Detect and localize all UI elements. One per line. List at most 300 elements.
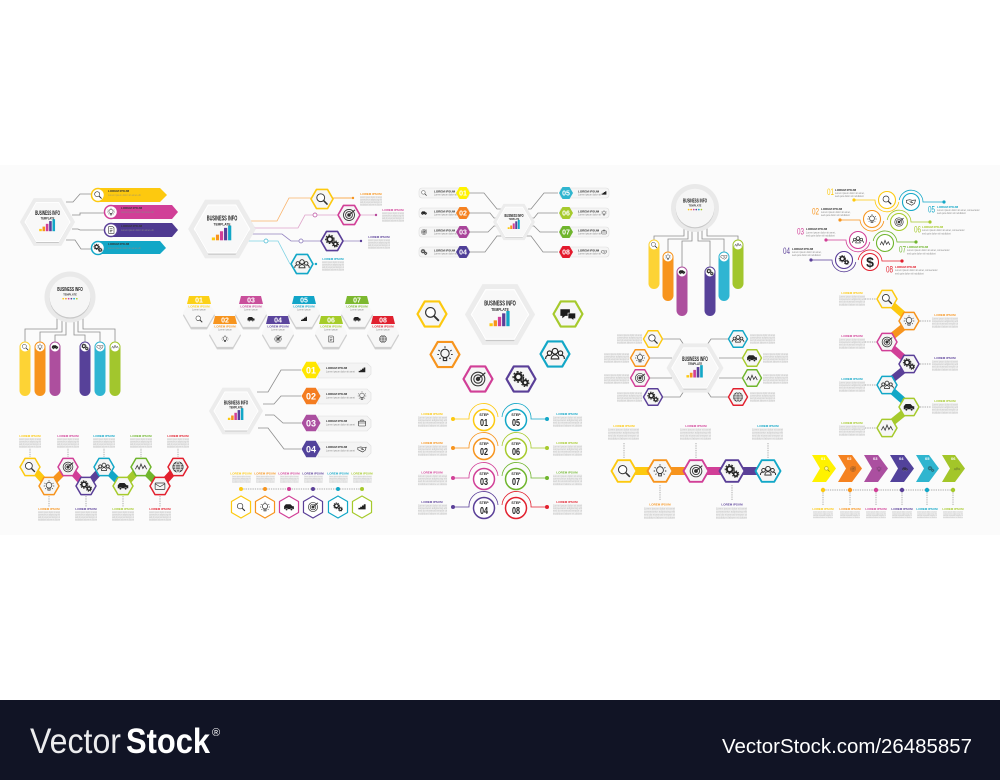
timeline labels: LOREM IPSUM [891,507,913,511]
step 04 [451,491,498,518]
step 01 [451,403,498,430]
label 4: LOREM IPSUM [322,257,344,261]
icon hex: target [464,366,492,392]
pill magenta [676,267,688,316]
label 2 [382,208,404,222]
row 02: 02 [306,392,316,402]
ribbon teal: LOREM IPSUM [108,242,130,246]
step 04: STEP [479,501,489,505]
text 05 [928,204,980,215]
tab 07 [559,226,609,238]
hub circle [44,272,96,322]
hex gears [328,496,348,518]
card 05: Lorem ipsum [297,308,311,312]
connector lines [469,193,558,252]
card 04: LOREM IPSUM [267,324,289,328]
step 08: 08 [512,506,520,517]
step 08: STEP [511,501,521,505]
text 02: sed quis dolor sit incididunt [821,214,850,217]
chevron 01 [812,455,836,482]
text 03: 03 [797,226,804,236]
text 07: Lorem ipsum dolor sit amet, consectetur [907,249,950,252]
ribbon teal [92,241,166,254]
card 04: Lorem ipsum [271,328,285,332]
text 04: sed quis dolor sit incididunt [792,254,821,257]
hex search [231,496,251,518]
tab 08: Lorem ipsum dolor sit [578,252,601,256]
tab 08 [559,246,609,258]
tab 01: 01 [459,190,467,198]
step 05: 05 [512,418,520,429]
hub hexagon: TEMPLATE [229,405,243,409]
text 06: 06 [914,224,921,234]
hub hexagon: BUSINESS INFO [207,214,237,223]
hub hexagon [666,343,724,393]
hex car [279,496,299,518]
hub hexagon: TEMPLATE [214,222,231,227]
chain connectors [890,303,906,424]
card 05: 05 [300,298,308,304]
tab 03: 03 [459,230,467,236]
card 08: 08 [379,318,387,324]
label 3 [368,235,390,249]
node bulb [630,350,650,366]
step 03: 03 [480,477,488,488]
tab 01: Lorem ipsum dolor sit [434,194,457,196]
icon hex: people [540,341,570,367]
label 2: LOREM IPSUM [382,208,404,212]
chevron 03: 03 [873,456,878,461]
labels: LOREM IPSUM [302,472,324,476]
labels: LOREM IPSUM [278,472,300,476]
node 7 [131,458,151,476]
icons row [25,462,183,491]
text 07: sed quis dolor sit incididunt [907,252,936,256]
labels: LOREM IPSUM [351,472,373,476]
step labels: LOREM IPSUM [421,441,443,445]
step labels: LOREM IPSUM [421,500,443,504]
top labels: LOREM IPSUM [167,434,189,438]
node wave [742,370,762,386]
ribbon pink: LOREM IPSUM [121,206,143,210]
zigzag labels: LOREM IPSUM [841,421,863,425]
ribbon teal: Lorem ipsum dolor sit amet elit [108,247,141,250]
tab 03: LOREM IPSUM [434,228,456,232]
step labels: LOREM IPSUM [421,412,443,416]
node 5 [94,458,114,476]
pill orange [34,342,46,396]
step 05 [502,403,549,430]
text 06 [914,224,965,236]
node target [630,370,650,386]
panel: vertical zigzag [839,290,958,437]
hex target [684,460,708,482]
node 1 [20,458,40,476]
chevron 01: 01 [821,456,826,461]
circle 03 [824,232,870,252]
image id: VectorStock.com/26485857 [722,736,972,758]
hex gears [899,355,919,373]
text 04: Lorem ipsum dolor sit amet, [792,251,822,254]
hex people [756,460,780,482]
chevron 04 [890,455,914,482]
circle 07 [873,231,918,252]
text 07 [899,244,950,256]
step labels: LOREM IPSUM [556,470,578,474]
row 03: Lorem ipsum dolor sit amet [326,424,355,426]
card 05: LOREM IPSUM [293,304,315,308]
panel: hub with side nodes [604,331,788,405]
row 02: LOREM IPSUM [326,392,348,396]
hub hexagon: TEMPLATE [509,218,519,221]
label 3: LOREM IPSUM [368,235,390,239]
panel: orbit circles with numbered text [783,187,980,276]
hub hexagon: TEMPLATE [41,216,55,220]
top labels: LOREM IPSUM [93,434,115,438]
node people [728,331,748,347]
card 04 [262,316,294,349]
timeline dots [821,488,955,492]
hex bulb [648,460,672,482]
text 04: 04 [783,246,790,256]
step labels: LOREM IPSUM [556,441,578,445]
timeline labels: LOREM IPSUM [916,507,938,511]
tab 06: 06 [562,210,570,218]
text 02: Lorem ipsum dolor sit amet, [821,211,851,214]
tab 01 [419,187,470,199]
panel: six outlined hexagons [230,472,373,518]
ribbon yellow: LOREM IPSUM [108,189,130,193]
card 03: LOREM IPSUM [240,304,262,308]
pill green [110,342,120,396]
card 06 [315,316,347,349]
row 04: LOREM IPSUM [326,445,348,449]
text 02: 02 [812,206,819,216]
step labels: LOREM IPSUM [556,500,578,504]
tab 03: Lorem ipsum dolor sit [434,232,457,236]
hub hexagon: TEMPLATE [688,362,703,366]
text 07: LOREM IPSUM [907,245,929,249]
card 06: Lorem ipsum [324,328,338,332]
step labels [418,412,582,515]
chain bars [634,467,760,475]
hub circle: TEMPLATE [689,203,701,207]
hub hexagon: BUSINESS INFO [505,213,524,218]
hub hexagon [465,284,535,345]
tab 06: Lorem ipsum dolor sit [578,214,601,216]
card 05 [288,296,320,329]
connector lines [654,227,738,268]
colored connector lines [239,197,377,265]
dotted timeline [241,488,362,490]
hex target [303,496,323,518]
bottom labels: LOREM IPSUM [38,507,60,511]
step 03: STEP [479,472,489,476]
label 4 [322,257,344,271]
panel: horizontal chain [608,424,783,519]
tab 04 [419,246,470,258]
pill magenta [50,342,60,396]
node 3 [58,458,78,476]
labels [230,472,373,483]
circle 08: $ [866,254,874,270]
tab 05: 05 [562,190,570,198]
ribbon yellow [92,188,167,202]
step 02: STEP [479,442,489,446]
VectorStock logo: Stock [126,722,210,761]
ribbon purple: Lorem ipsum dolor sit amet elit [121,229,154,232]
tab 07: 07 [562,230,570,236]
step 01: 01 [480,418,488,429]
card 02: 02 [221,318,229,324]
node 6 [113,477,133,495]
timeline labels: LOREM IPSUM [942,507,964,511]
timeline labels [812,507,964,519]
step 03 [451,462,498,490]
text 08: LOREM IPSUM [895,265,917,269]
card 08: LOREM IPSUM [372,324,394,328]
panel: hub with numbered bars [209,362,371,457]
step 02: 02 [480,447,488,458]
hub circle: TEMPLATE [63,292,77,296]
step labels: LOREM IPSUM [421,470,443,474]
dashed leaders [865,299,931,428]
text 01: 01 [827,187,834,197]
chain connectors [35,471,174,482]
hub hexagon [188,200,256,258]
row 01: LOREM IPSUM [326,366,348,370]
card 08: Lorem ipsum [376,328,390,332]
panel: hub with eight numbered tabs [419,187,609,258]
row 03 [302,415,371,431]
tab 07: Lorem ipsum dolor sit [578,232,601,236]
hub hexagon: BUSINESS INFO [682,356,708,363]
top labels [19,434,189,448]
tab 08: LOREM IPSUM [578,248,600,252]
hub circle [671,184,719,232]
card 03 [235,296,267,329]
node 2 [39,477,59,495]
bottom labels: LOREM IPSUM [112,507,134,511]
icon hex: bulb [430,342,460,367]
chevron 02 [838,455,862,482]
text 03 [797,226,836,238]
tab 05 [559,187,609,199]
hub hexagon: TEMPLATE [491,307,509,312]
node 4 [76,477,96,495]
step 04: 04 [480,506,488,517]
hex bulb [899,312,919,330]
zigzag labels: LOREM IPSUM [841,377,863,381]
step 01: STEP [479,413,489,417]
card 07 [341,296,373,329]
tab 06: LOREM IPSUM [578,210,600,214]
hex car [899,398,919,416]
pill teal [94,342,106,396]
text 01: Lorem ipsum dolor sit amet, [835,192,865,195]
pill purple [80,342,90,396]
pill orange [662,252,674,301]
card 08 [367,316,399,349]
text 04 [783,246,822,257]
card 02 [209,316,241,349]
pill green [732,240,744,289]
connector lines [257,370,301,449]
chevron 04: 04 [899,456,904,461]
hub hexagon: BUSINESS INFO [484,299,516,308]
timeline labels: LOREM IPSUM [865,507,887,511]
text 08: Lorem ipsum dolor sit amet, consectetur [895,269,938,272]
dashed leaders [30,447,178,507]
circle 02 [838,210,884,231]
hex stairs [352,496,372,518]
top labels: LOREM IPSUM [57,434,79,438]
panel: circle org chart right [648,184,744,316]
dashed leaders [624,443,768,500]
hex target [877,333,897,351]
tab 02: Lorem ipsum dolor sit [434,214,457,216]
step 07: 07 [512,477,520,488]
connector lines [66,194,104,249]
text 08 [886,264,938,276]
card 04: 04 [274,318,282,324]
pill yellow [20,342,30,396]
text 01: sed quis dolor sit incididunt [835,195,864,198]
hub hexagon [209,388,263,434]
card 02: LOREM IPSUM [214,324,236,328]
card 01: 01 [195,298,203,304]
label 1: LOREM IPSUM [360,192,382,196]
text 05: sed quis dolor sit incididunt [937,212,966,215]
pill teal [718,252,730,301]
row 01: Lorem ipsum dolor sit amet [326,370,355,374]
VectorStock logo: Vector [30,722,121,761]
text 05: LOREM IPSUM [937,205,959,209]
text 08: 08 [886,264,893,274]
hub circle: BUSINESS INFO [683,198,707,204]
connector lines [650,339,742,397]
panel: hexagon hub with ribbons [20,188,178,254]
row 03: LOREM IPSUM [326,419,348,423]
card 01: Lorem ipsum [192,308,206,312]
text 05: Lorem ipsum dolor sit amet, consectetur [937,209,980,212]
panel: hexagon hub with four nodes [188,189,404,274]
panel: circle org chart left [20,272,120,396]
hub hexagon [20,198,75,246]
node gears [644,389,662,405]
text 04: LOREM IPSUM [792,247,814,251]
text 07: 07 [899,244,906,254]
tab 07: LOREM IPSUM [578,228,600,232]
hex search [612,460,636,482]
panel: numbered hexagon cards [183,296,399,349]
ribbon purple [104,223,178,237]
pill purple [704,267,716,316]
card 06: 06 [327,318,335,324]
tab 05: Lorem ipsum dolor sit [578,194,601,196]
card 03: Lorem ipsum [244,308,258,312]
text 01 [827,187,865,198]
circle 01 [852,192,899,212]
chain labels: LOREM IPSUM [721,502,743,506]
node: people [291,254,313,274]
top labels: LOREM IPSUM [130,434,152,438]
chevron 06 [942,455,965,482]
tab 04: Lorem ipsum dolor sit [434,252,457,256]
label 1 [360,192,382,206]
row 01 [302,362,371,378]
bottom labels: LOREM IPSUM [149,507,171,511]
text 01: LOREM IPSUM [835,188,857,192]
tab 05: LOREM IPSUM [578,190,600,194]
text 02 [812,206,851,217]
card 01: LOREM IPSUM [188,304,210,308]
hub circle: BUSINESS INFO [57,287,83,293]
step 06 [502,432,549,460]
ribbon purple: LOREM IPSUM [121,224,143,228]
ribbon pink [104,205,178,219]
timeline labels: LOREM IPSUM [812,507,834,511]
zigzag labels: LOREM IPSUM [934,356,956,360]
icon hex: gears [506,366,536,392]
chevron 02: 02 [847,456,852,461]
hex gears [720,460,744,482]
node car [742,350,762,366]
hub hexagon: BUSINESS INFO [224,400,248,406]
text 06: LOREM IPSUM [922,225,944,229]
step 07: STEP [511,472,521,476]
footer bar [0,700,1000,780]
side text blocks [604,333,788,402]
chain labels: LOREM IPSUM [649,502,671,506]
chain labels: LOREM IPSUM [685,424,707,428]
row 04 [302,441,371,457]
step 06: STEP [511,442,521,446]
hub hexagon: BUSINESS INFO [35,211,60,217]
tab 02 [419,207,470,219]
node: search [311,189,333,209]
node: target [338,205,360,225]
card 07: 07 [353,298,361,304]
step 07 [502,462,549,490]
labels: LOREM IPSUM [230,472,252,476]
card 03: 03 [247,298,255,304]
panel: step circles [418,403,582,518]
row 01: 01 [306,366,316,376]
chevron 05: 05 [925,456,930,461]
chevron 05 [916,455,939,482]
text 05: 05 [928,204,935,214]
tab 04: LOREM IPSUM [434,248,456,252]
ribbon pink: Lorem ipsum dolor sit amet elit [121,211,154,214]
chevron 03 [864,455,888,482]
VectorStock logo [30,722,220,761]
text 06: Lorem ipsum dolor sit amet, consectetur [922,229,965,232]
icon hex: chat [554,301,582,327]
chain labels: LOREM IPSUM [613,424,635,428]
top labels: LOREM IPSUM [19,434,41,438]
text 03: Lorem ipsum dolor sit amet, [806,232,836,234]
zigzag labels: LOREM IPSUM [841,334,863,338]
row 04: Lorem ipsum dolor sit amet [326,450,355,452]
text 03: sed quis dolor sit incididunt [806,234,835,238]
zigzag labels: LOREM IPSUM [841,291,863,295]
tab 02: 02 [459,210,467,218]
circle 06 [887,210,932,230]
circle 05 [899,190,946,210]
tab 06 [559,207,609,219]
row 02 [302,388,371,404]
